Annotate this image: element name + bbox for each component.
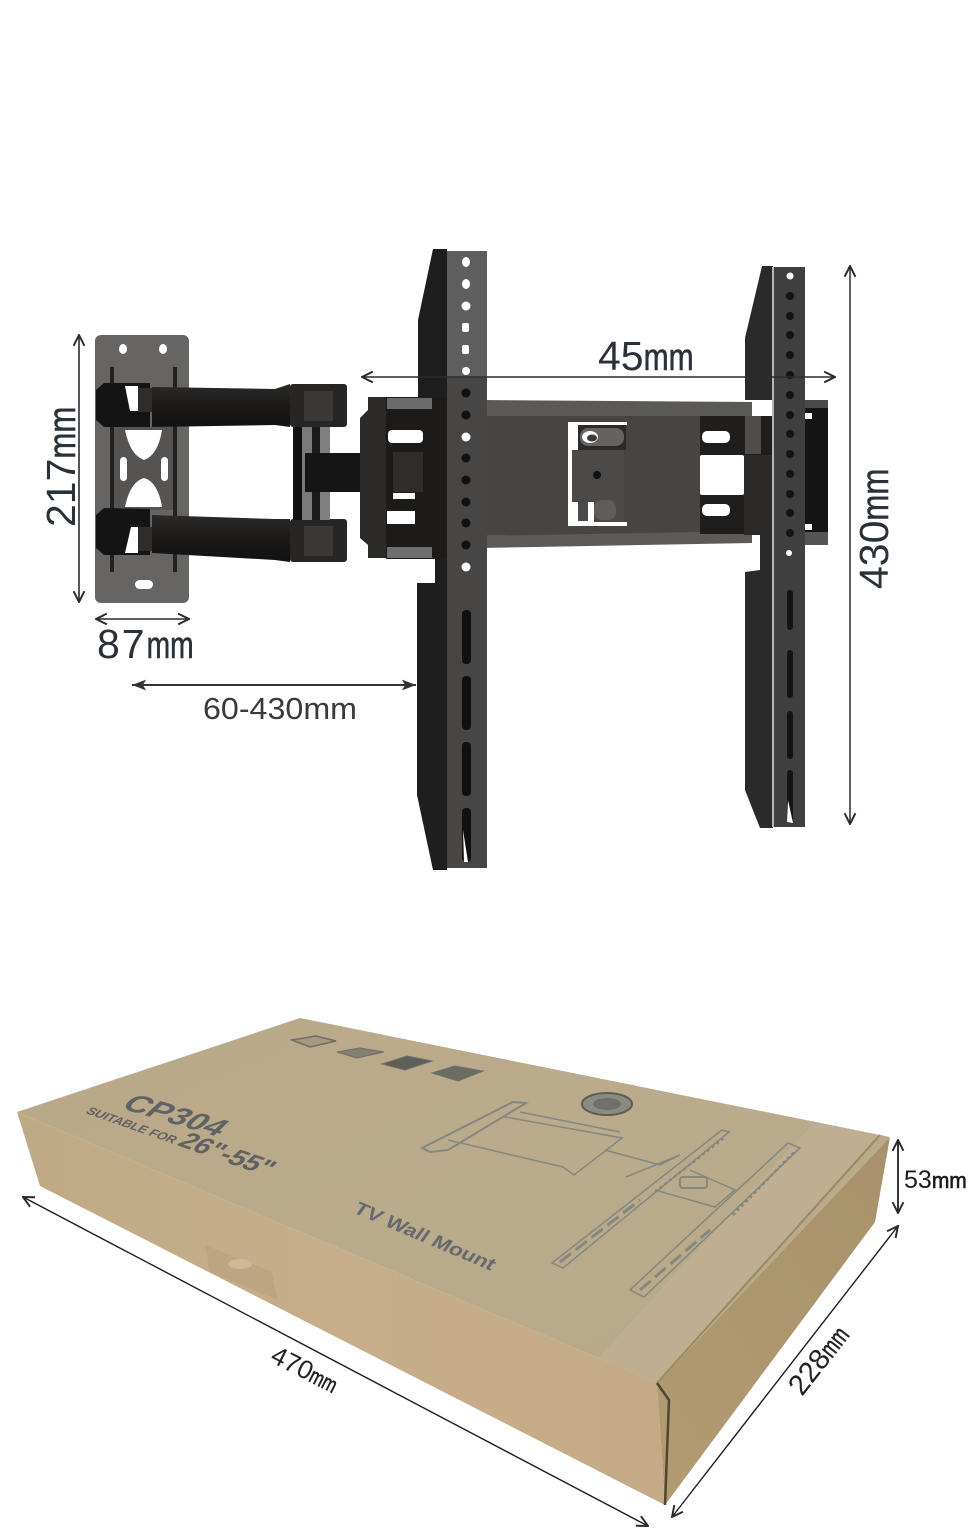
dimension: rail height 430mm: 430mm bbox=[851, 469, 897, 589]
dimension: box width 228mm: 228mm bbox=[782, 1320, 856, 1401]
panel: cardboard box bbox=[17, 1018, 890, 1505]
box title CP304: CP304 bbox=[115, 1089, 237, 1141]
box label TV Wall Mount: TV Wall Mount bbox=[349, 1198, 500, 1275]
dimension: extension 60-430mm: 60-430mm bbox=[203, 691, 357, 726]
box subtitle suitable size: SUITABLE FOR 26"-55" bbox=[81, 1095, 284, 1181]
center locking bracket bbox=[568, 422, 627, 526]
left vertical rail bbox=[417, 249, 487, 870]
wall plate bbox=[95, 335, 189, 603]
dimension: rail spacing 45mm: 45mm bbox=[598, 333, 694, 379]
dimension: wall plate width 87mm: 87mm bbox=[97, 621, 194, 667]
dimension: box width 228mm bbox=[672, 1226, 898, 1517]
right vertical rail bbox=[745, 266, 805, 828]
lower swing arm bbox=[96, 508, 347, 562]
box feature icons bbox=[292, 1036, 483, 1081]
tape patch bbox=[205, 1245, 277, 1300]
dimension: box length 470mm bbox=[23, 1197, 648, 1526]
box right end face bbox=[657, 1137, 890, 1505]
rotating bracket frame bbox=[360, 397, 446, 559]
box seal emblem bbox=[582, 1093, 632, 1115]
corrugated corner edge bbox=[657, 1383, 669, 1505]
cross beam bbox=[480, 400, 828, 548]
upper swing arm bbox=[96, 383, 347, 427]
box top face bbox=[17, 1018, 890, 1383]
box front face bbox=[17, 1112, 665, 1505]
dimension: box length 470mm: 470mm bbox=[266, 1340, 344, 1399]
box printed mount line drawing bbox=[422, 1102, 800, 1297]
dimension: box height 53mm: 53mm bbox=[904, 1166, 967, 1194]
hinge posts and link arm bbox=[293, 427, 365, 520]
end flap crease bbox=[657, 1135, 880, 1383]
dimension: wall plate height 217mm: 217mm bbox=[38, 407, 84, 527]
panel: wall mount product bbox=[95, 249, 828, 870]
end flap band bbox=[598, 1122, 878, 1383]
dimension: box height 53mm bbox=[898, 1140, 967, 1213]
